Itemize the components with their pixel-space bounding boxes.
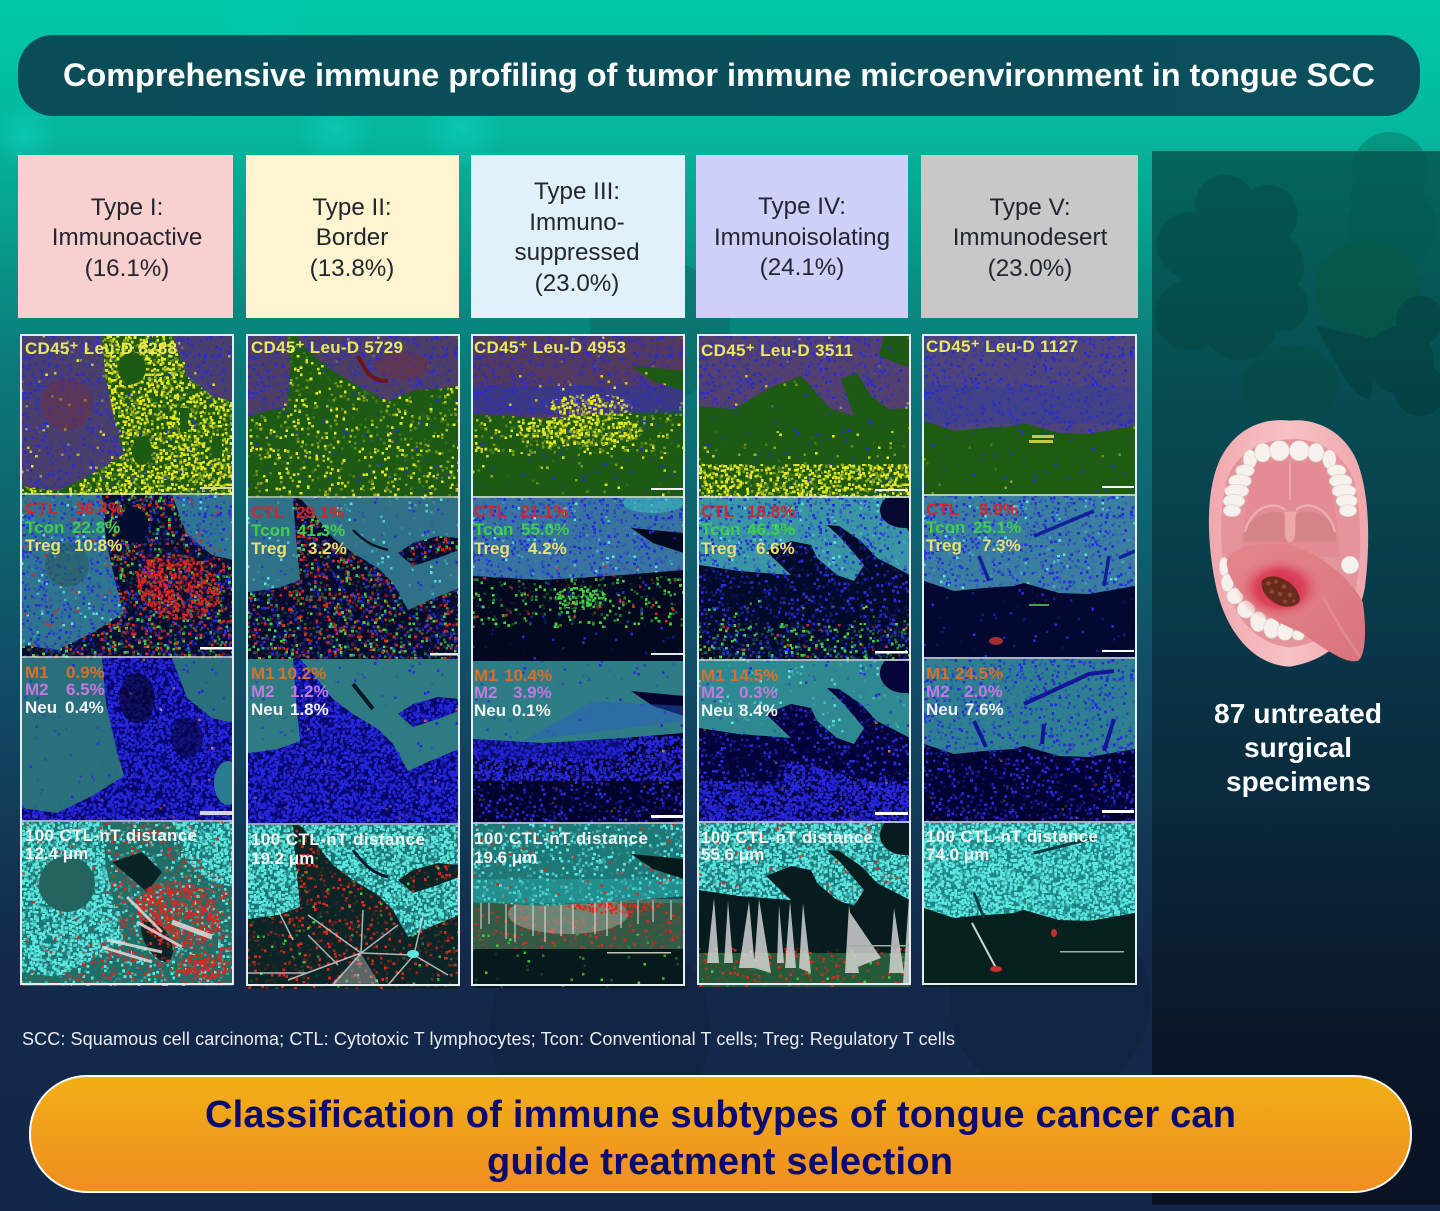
subtype header: Type II: Type II: [312, 194, 392, 221]
icon: open mouth with tongue tumor [1209, 420, 1368, 667]
image: CTL Tcon Treg 18.8 46.3 6.6: Tcon [701, 520, 740, 539]
image: CTL Tcon Treg 18.8 46.3 6.6 [699, 498, 909, 661]
specimen count text: specimens [1226, 766, 1371, 797]
image: CTL Tcon Treg 36.4 22.8 10.8: 22.8% [72, 518, 120, 537]
image frame [21, 335, 233, 984]
image: CTL Tcon Treg 18.8 46.3 6.6: 6.6% [756, 539, 795, 558]
image: CTL Tcon Treg 18.8 46.3 6.6: CTL [701, 502, 734, 521]
image: 100 CTL-nT distance 19.2: 19.2 μm [251, 849, 314, 868]
lower teeth [1219, 556, 1359, 640]
image: CD45 Leu-D 5729 [248, 336, 459, 500]
image: CD45 Leu-D 4953 [473, 336, 684, 500]
subtype header: Type I: Type I: [91, 194, 163, 221]
conclusion banner [30, 1076, 1411, 1192]
conclusion text [205, 1094, 1236, 1183]
image: M1 M2 Neu 10.2 1.2 1.8: M1 [251, 664, 275, 683]
image: M1 M2 Neu 0.9 6.5 0.4: 0.4% [65, 698, 104, 717]
image: CTL Tcon Treg 9.9 25.1 7.3: Treg [926, 536, 962, 555]
panel: Type V micrographs [923, 335, 1136, 987]
image: M1 M2 Neu 24.5 2.0 7.6 [924, 659, 1135, 823]
image: 100 CTL-nT distance 12.4: 100 CTL-nT distance [25, 826, 197, 845]
image: CTL Tcon Treg 36.4 22.8 10.8: 10.8% [74, 536, 122, 555]
image: CD45 Leu-D 3511 [699, 336, 910, 500]
image: 100 CTL-nT distance 74.0: 100 CTL-nT distance [926, 827, 1098, 846]
conclusion text: Classification of immune subtypes of tongue cancer can [205, 1094, 1236, 1136]
image: M1 M2 Neu 10.2 1.2 1.8: 1.8% [290, 700, 329, 719]
image: CTL Tcon Treg 29.1 41.3 3.2: Tcon [251, 521, 290, 540]
image: CTL Tcon Treg 21.1 55.0 4.2: 21.1% [520, 502, 568, 521]
image: CTL Tcon Treg 36.4 22.8 10.8 [22, 495, 233, 659]
panel: Type IV micrographs [698, 335, 928, 987]
image: CD45 Leu-D 5729: CD45⁺ Leu-D 5729 [251, 338, 403, 357]
image: CTL Tcon Treg 9.9 25.1 7.3: CTL [926, 500, 959, 519]
subtype header: Type III: (23.0%) [535, 270, 619, 297]
subtype header: Type IV: (24.1%) [760, 254, 844, 281]
right side panel [1152, 151, 1440, 1205]
image: CD45 Leu-D 8288 [22, 336, 233, 500]
image: CTL Tcon Treg 18.8 46.3 6.6: Treg [701, 539, 737, 558]
image: CTL Tcon Treg 9.9 25.1 7.3: Tcon [926, 518, 965, 537]
image: CTL Tcon Treg 29.1 41.3 3.2: 29.1% [296, 503, 344, 522]
image: CTL Tcon Treg 29.1 41.3 3.2: CTL [251, 503, 284, 522]
image: M1 M2 Neu 24.5 2.0 7.6: 24.5% [955, 664, 1003, 683]
subtype header: Type I: (16.1%) [85, 255, 169, 282]
image: M1 M2 Neu 14.5 0.3 8.4: 8.4% [739, 701, 778, 720]
image: CTL Tcon Treg 29.1 41.3 3.2: 41.3% [297, 521, 345, 540]
background glows [0, 0, 1150, 1140]
subtype header: Type V: (23.0%) [988, 255, 1072, 282]
subtype header: Type III: Immuno- [529, 209, 625, 236]
footnote: SCC: Squamous cell carcinoma; CTL: Cytotoxic T lymphocytes; Tcon: Conventional T cells; Treg: Regulatory T cells [22, 1029, 955, 1049]
image: M1 M2 Neu 0.9 6.5 0.4: 0.9% [66, 663, 105, 682]
subtype header: Type II: (13.8%) [310, 255, 394, 282]
subtype header: Type I: Immunoactive [52, 224, 202, 251]
image frame [247, 335, 459, 985]
conclusion text: guide treatment selection [487, 1141, 953, 1183]
image: M1 M2 Neu 14.5 0.3 8.4: M2 [701, 683, 725, 702]
specimen count text: 87 untreated [1214, 698, 1382, 729]
image: M1 M2 Neu 10.4 3.9 0.1: 3.9% [513, 683, 552, 702]
tongue [1227, 543, 1365, 661]
image: M1 M2 Neu 10.2 1.2 1.8: 1.2% [290, 682, 329, 701]
specimen count text [1214, 698, 1382, 797]
image: M1 M2 Neu 24.5 2.0 7.6: 7.6% [965, 700, 1004, 719]
image: CTL Tcon Treg 36.4 22.8 10.8: Tcon [25, 518, 64, 537]
image: M1 M2 Neu 10.4 3.9 0.1: Neu [474, 701, 506, 720]
subtype header: Type III: suppressed [514, 239, 640, 266]
image: CTL Tcon Treg 36.4 22.8 10.8: Treg [25, 536, 61, 555]
image: CTL Tcon Treg 29.1 41.3 3.2: 3.2% [308, 539, 347, 558]
image: M1 M2 Neu 10.2 1.2 1.8 [248, 659, 459, 823]
image: CD45 Leu-D 1127: CD45⁺ Leu-D 1127 [926, 337, 1078, 356]
image: M1 M2 Neu 10.4 3.9 0.1 [473, 661, 684, 825]
image: M1 M2 Neu 10.4 3.9 0.1: 0.1% [512, 701, 551, 720]
image: 100 CTL-nT distance 12.4: 12.4 μm [25, 844, 88, 863]
subtype header: Type I [18, 155, 233, 318]
image: M1 M2 Neu 10.4 3.9 0.1: M1 [474, 666, 498, 685]
image frame [472, 335, 684, 985]
image: 100 CTL-nT distance 19.6: 19.6 μm [474, 848, 537, 867]
subtype header: Type V: Type V: [989, 194, 1071, 221]
image: CTL Tcon Treg 36.4 22.8 10.8: 36.4% [75, 499, 123, 518]
decorative cell clusters [1155, 132, 1440, 425]
image: M1 M2 Neu 10.2 1.2 1.8: Neu [251, 700, 283, 719]
image: 100 CTL-nT distance 19.2: 100 CTL-nT distance [251, 830, 425, 849]
image: 100 CTL-nT distance 19.6 [473, 824, 684, 988]
subtype header: Type V: Immunodesert [953, 224, 1108, 251]
image: M1 M2 Neu 14.5 0.3 8.4 [699, 661, 909, 823]
panel: Type III micrographs [472, 335, 684, 988]
image: CD45 Leu-D 3511: CD45⁺ Leu-D 3511 [701, 341, 853, 360]
image: M1 M2 Neu 10.4 3.9 0.1: M2 [474, 683, 498, 702]
image: M1 M2 Neu 24.5 2.0 7.6: M2 [926, 682, 950, 701]
title: Comprehensive immune profiling of tumor immune microenvironment in tongue SCC [63, 57, 1375, 93]
image: 100 CTL-nT distance 74.0: 74.0 μm [926, 845, 989, 864]
image: M1 M2 Neu 0.9 6.5 0.4 [22, 658, 242, 822]
image: CTL Tcon Treg 21.1 55.0 4.2: Treg [474, 539, 510, 558]
panel: Type II micrographs [247, 335, 459, 989]
image: CTL Tcon Treg 9.9 25.1 7.3 [924, 496, 1135, 660]
image frame [698, 335, 910, 984]
image: M1 M2 Neu 0.9 6.5 0.4: Neu [25, 698, 57, 717]
image: CTL Tcon Treg 21.1 55.0 4.2: 55.0% [521, 520, 569, 539]
image: M1 M2 Neu 14.5 0.3 8.4: M1 [701, 666, 725, 685]
subtype header: Type II [246, 155, 459, 318]
image: M1 M2 Neu 10.2 1.2 1.8: M2 [251, 682, 275, 701]
image: M1 M2 Neu 0.9 6.5 0.4: M1 [25, 663, 49, 682]
image: M1 M2 Neu 24.5 2.0 7.6: Neu [926, 700, 958, 719]
image: CTL Tcon Treg 21.1 55.0 4.2 [473, 493, 684, 662]
image: M1 M2 Neu 0.9 6.5 0.4: 6.5% [66, 680, 105, 699]
image: M1 M2 Neu 24.5 2.0 7.6: 2.0% [964, 682, 1003, 701]
specimen count text: surgical [1244, 732, 1352, 763]
image: M1 M2 Neu 10.2 1.2 1.8: 10.2% [278, 664, 326, 683]
image: CTL Tcon Treg 21.1 55.0 4.2: CTL [474, 502, 507, 521]
image: CTL Tcon Treg 18.8 46.3 6.6: 46.3% [747, 520, 795, 539]
image: CD45 Leu-D 1127 [924, 336, 1135, 500]
image: CTL Tcon Treg 18.8 46.3 6.6: 18.8% [747, 502, 795, 521]
panel: Type I micrographs [21, 335, 242, 986]
subtype header: Type III [471, 155, 685, 318]
subtype header: Type II: Border [316, 224, 388, 251]
image: M1 M2 Neu 0.9 6.5 0.4: M2 [25, 680, 49, 699]
image frame [923, 335, 1136, 984]
image: CTL Tcon Treg 21.1 55.0 4.2: 4.2% [528, 539, 567, 558]
image: CTL Tcon Treg 9.9 25.1 7.3: 7.3% [982, 536, 1021, 555]
upper teeth [1223, 441, 1357, 517]
subtype header: Type V [921, 155, 1138, 318]
image: CTL Tcon Treg 9.9 25.1 7.3: 25.1% [973, 518, 1021, 537]
image: M1 M2 Neu 24.5 2.0 7.6: M1 [926, 664, 950, 683]
image: M1 M2 Neu 10.4 3.9 0.1: 10.4% [504, 666, 552, 685]
image: CTL Tcon Treg 29.1 41.3 3.2: Treg [251, 539, 287, 558]
image: M1 M2 Neu 14.5 0.3 8.4: 0.3% [739, 683, 778, 702]
image: 100 CTL-nT distance 55.6 [699, 823, 910, 987]
subtype header: Type IV [696, 155, 908, 318]
subtype header: Type III: Type III: [534, 178, 620, 205]
image: CD45 Leu-D 8288: CD45⁺ Leu-D 8288 [25, 339, 177, 358]
image: CTL Tcon Treg 29.1 41.3 3.2 [248, 498, 459, 662]
title bar [18, 35, 1420, 116]
subtype header: Type IV: Type IV: [758, 193, 846, 220]
image: M1 M2 Neu 14.5 0.3 8.4: Neu [701, 701, 733, 720]
tumor [1262, 576, 1300, 607]
image: CTL Tcon Treg 9.9 25.1 7.3: 9.9% [979, 500, 1018, 519]
image: CD45 Leu-D 4953: CD45⁺ Leu-D 4953 [474, 338, 626, 357]
image: 100 CTL-nT distance 19.6: 100 CTL-nT distance [474, 829, 648, 848]
image: 100 CTL-nT distance 74.0 [924, 823, 1135, 987]
image: 100 CTL-nT distance 12.4 [22, 822, 233, 986]
image: 100 CTL-nT distance 19.2 [248, 825, 459, 989]
image: CTL Tcon Treg 36.4 22.8 10.8: CTL [25, 499, 58, 518]
image: 100 CTL-nT distance 55.6: 100 CTL-nT distance [701, 828, 873, 847]
image: 100 CTL-nT distance 55.6: 55.6 μm [701, 845, 764, 864]
subtype header: Type IV: Immunoisolating [714, 224, 890, 251]
image: M1 M2 Neu 14.5 0.3 8.4: 14.5% [730, 666, 778, 685]
image: CTL Tcon Treg 21.1 55.0 4.2: Tcon [474, 520, 513, 539]
